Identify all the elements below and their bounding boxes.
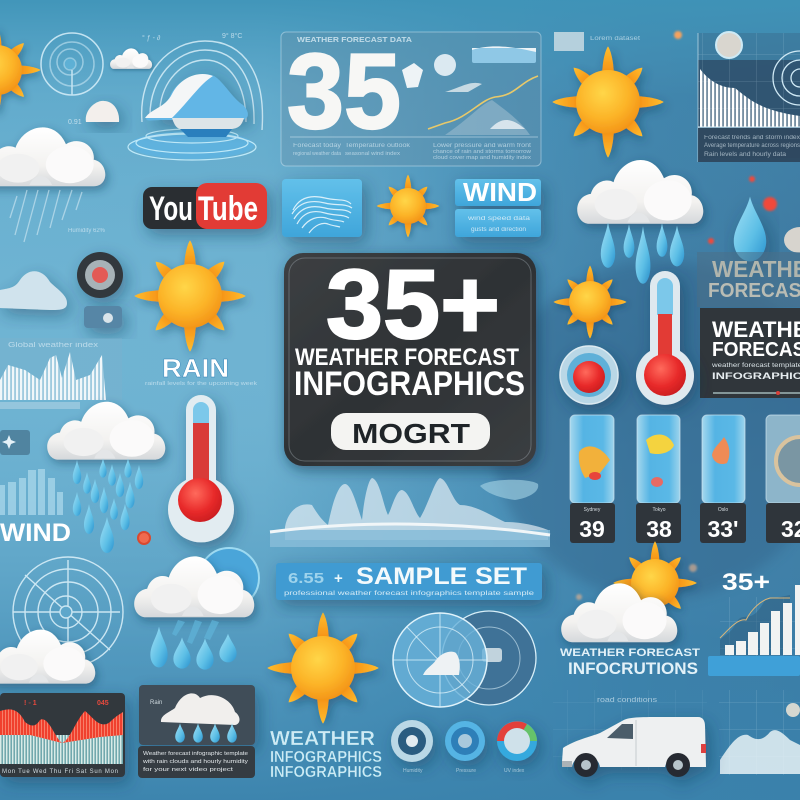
chart caption text bbox=[704, 135, 800, 158]
heading: weather infographics bottom: INFOGRAPHICS bbox=[270, 749, 382, 766]
panel: temperature tube 3 bbox=[700, 415, 746, 543]
icon: rain cluster bbox=[73, 458, 143, 553]
panel: chart left bbox=[0, 338, 122, 409]
panel: WIND label: wind speed data bbox=[467, 216, 531, 222]
panel footer text: seasonal wind index bbox=[345, 151, 401, 157]
panel: chart left: Global weather index bbox=[8, 342, 99, 349]
panel: red area chart bbox=[0, 693, 125, 777]
panel: temperature tube 2: Tokyo bbox=[652, 507, 666, 513]
icon: thermometer right bbox=[636, 271, 694, 405]
panel: top right chart bbox=[698, 32, 800, 162]
panel: 35+ bar chart: 35+ bbox=[722, 569, 770, 596]
icon: moon circle bbox=[716, 32, 742, 58]
scribble text top: 9° 8°C bbox=[222, 32, 242, 40]
gauge captions bbox=[403, 768, 525, 774]
panel footer text: Forecast today bbox=[293, 143, 341, 149]
subtitle: WEATHER FORECAST bbox=[295, 344, 519, 371]
icon: white van bbox=[562, 717, 706, 777]
number 35: 35 bbox=[287, 31, 401, 151]
panel: forecast dark: weather forecast template bbox=[711, 363, 800, 369]
icon: small cloud puff bbox=[86, 101, 119, 122]
icon: small sun right bbox=[553, 265, 627, 339]
label: RAIN: RAIN bbox=[162, 353, 229, 383]
panel: temperature tube 1: 39 bbox=[579, 516, 605, 542]
panel: temperature tube 1 bbox=[570, 415, 615, 543]
panel heading text: WEATHER FORECAST DATA bbox=[297, 37, 412, 44]
panel: grid behind van bbox=[553, 690, 707, 770]
text: weather forecast infocrutions: WEATHER FORECAST bbox=[560, 647, 700, 659]
panel footer text bbox=[293, 143, 532, 161]
panel: cloud card bbox=[139, 685, 255, 745]
icon: YouTube logo: Tube bbox=[198, 190, 258, 228]
panel: wave button bbox=[282, 179, 362, 237]
icon: small sun center bbox=[377, 175, 439, 237]
detail text top right: Lorem dataset bbox=[590, 36, 640, 42]
icon: target ring bbox=[41, 33, 103, 95]
panel: cloud card text: Weather forecast infographic template bbox=[143, 751, 248, 757]
icon: small box bbox=[84, 306, 122, 328]
panel footer text: Lower pressure and warm front bbox=[433, 143, 531, 149]
panel: sample set banner: SAMPLE SET bbox=[356, 563, 527, 590]
panel: forecast faint bbox=[697, 252, 800, 307]
scribble text top: 0.91 bbox=[68, 119, 82, 126]
panel: cloud card: Rain bbox=[150, 700, 162, 706]
panel: sample set banner: 6.55 bbox=[288, 570, 324, 587]
icon: plus blob bbox=[402, 63, 423, 88]
red sparks bbox=[708, 176, 777, 244]
icon: rain drops lower bbox=[150, 620, 237, 670]
big number: 35+ bbox=[326, 249, 500, 359]
chart caption text: Forecast trends and storm index bbox=[704, 135, 800, 141]
panel: WIND label bbox=[455, 177, 541, 237]
heading: weather infographics bottom: INFOGRAPHICS bbox=[270, 764, 382, 781]
heading: weather infographics bottom: WEATHER bbox=[270, 728, 376, 750]
panel: red area chart: 045 bbox=[97, 700, 109, 707]
icon: thermometer left bbox=[168, 395, 234, 542]
small detail text: Humidity 62% bbox=[68, 228, 106, 234]
line chart bbox=[428, 46, 538, 135]
icon: big sun bottom bbox=[267, 612, 379, 724]
icon: red ring bbox=[138, 532, 150, 544]
chart caption text: Rain levels and hourly data bbox=[704, 152, 787, 158]
icon: big sun top right bbox=[552, 46, 664, 158]
icon: double radar bbox=[393, 611, 536, 707]
panel: sample set banner bbox=[276, 563, 542, 600]
chart labels: ! ◦ 1 bbox=[24, 700, 37, 707]
icon: blue sphere bbox=[199, 548, 259, 608]
gauge captions: Humidity bbox=[403, 768, 423, 774]
icon: colour gauge bbox=[497, 721, 537, 761]
panel: WIND label: WIND bbox=[463, 177, 537, 207]
panel: sample set banner: professional weather forecast infographics template sample bbox=[284, 591, 535, 597]
icon: glass dome with cloud bbox=[128, 41, 262, 160]
MOGRT pill bbox=[331, 413, 490, 450]
panel: temperature tube 3: 33' bbox=[707, 516, 739, 542]
bar chart: wind bars bbox=[0, 469, 63, 515]
panel: temperature tube 4 bbox=[766, 415, 800, 543]
panel: temperature tube 1: Sydney bbox=[584, 507, 601, 513]
scribble text top bbox=[68, 32, 242, 126]
icon: big sun left bbox=[134, 240, 246, 352]
panel: temperature tube 2: 38 bbox=[646, 516, 672, 542]
scribble text top: ° ƒ ‑ ∂ bbox=[142, 34, 161, 42]
label: WIND: WIND bbox=[0, 519, 71, 547]
panel: WIND label: gusts and direction bbox=[471, 227, 526, 233]
panel: main title bbox=[284, 249, 536, 466]
panel: red area chart: Mon Tue Wed Thu Fri Sat Sun Mon bbox=[2, 769, 118, 775]
panel footer text: cloud cover map and humidity index bbox=[433, 155, 532, 161]
icon: sun top left bbox=[0, 26, 40, 114]
panel: grid behind van: road conditions bbox=[597, 697, 658, 704]
panel: cloud card text: for your next video project bbox=[143, 767, 234, 773]
spark glow bbox=[674, 31, 682, 39]
icon: radar rings left bbox=[13, 557, 123, 667]
chart caption text: Average temperature across regions bbox=[704, 143, 800, 149]
rain lines bbox=[10, 190, 82, 242]
panel: top glass 35 bbox=[281, 31, 541, 166]
text: weather forecast infocrutions: INFOCRUTIONS bbox=[568, 659, 698, 678]
icon: small cloud top bbox=[110, 48, 152, 69]
MOGRT pill: MOGRT bbox=[352, 418, 470, 449]
icon: rain drops under cloud bbox=[601, 222, 684, 284]
icon: compass bbox=[0, 430, 30, 455]
icon: circular gauge 2 bbox=[445, 721, 485, 761]
icon: cloud bottom left bbox=[0, 630, 95, 684]
panel: forecast dark bbox=[700, 308, 800, 398]
text: weather forecast infocrutions bbox=[560, 647, 700, 678]
panel footer text: chance of rain and storms tomorrow bbox=[433, 149, 531, 155]
icon: cloud lower bbox=[134, 556, 254, 617]
panel: cloud card text: with rain clouds and hourly humidity bbox=[142, 759, 248, 765]
icon: cloud left bbox=[47, 402, 165, 460]
title: INFOGRAPHICS bbox=[294, 365, 525, 403]
icon: large drop bbox=[734, 197, 766, 261]
icon: sun behind cloud bbox=[613, 541, 697, 625]
sparks bbox=[576, 564, 697, 600]
icon: red button bbox=[560, 346, 618, 404]
icon: YouTube logo: You bbox=[149, 190, 193, 228]
panel footer text: regional weather data bbox=[293, 151, 341, 157]
icon: YouTube logo bbox=[143, 183, 267, 229]
heading: weather infographics bottom bbox=[270, 728, 382, 781]
panel: temperature tube 3: Oslo bbox=[718, 507, 728, 513]
icon: large cloud top left bbox=[0, 127, 105, 186]
panel: sample set banner: + bbox=[334, 570, 343, 587]
icon: record dial bbox=[77, 252, 123, 298]
detail text top right bbox=[554, 32, 640, 51]
panel: mountain chart right bbox=[719, 690, 800, 775]
small caption: rainfall levels for the upcoming week bbox=[145, 381, 258, 387]
panel: mountain chart center bbox=[270, 478, 550, 547]
panel footer text: Temperature outlook bbox=[345, 143, 411, 149]
panel: 35+ bar chart bbox=[708, 569, 800, 676]
icon: circular gauge 1 bbox=[391, 720, 433, 762]
panel: temperature tube 2 bbox=[636, 415, 681, 543]
icon: cloud front bbox=[561, 583, 677, 642]
gauge captions: UV index bbox=[504, 768, 525, 774]
icon: white blob right bbox=[784, 227, 800, 253]
gauge captions: Pressure bbox=[456, 768, 476, 774]
icon: cloud top right bbox=[577, 160, 703, 224]
panel: cloud card text bbox=[138, 746, 255, 778]
icon: faded cloud left bbox=[0, 271, 67, 310]
panel: forecast dark: INFOGRAPHIC bbox=[712, 371, 800, 381]
icon: concentric target bbox=[773, 51, 800, 105]
